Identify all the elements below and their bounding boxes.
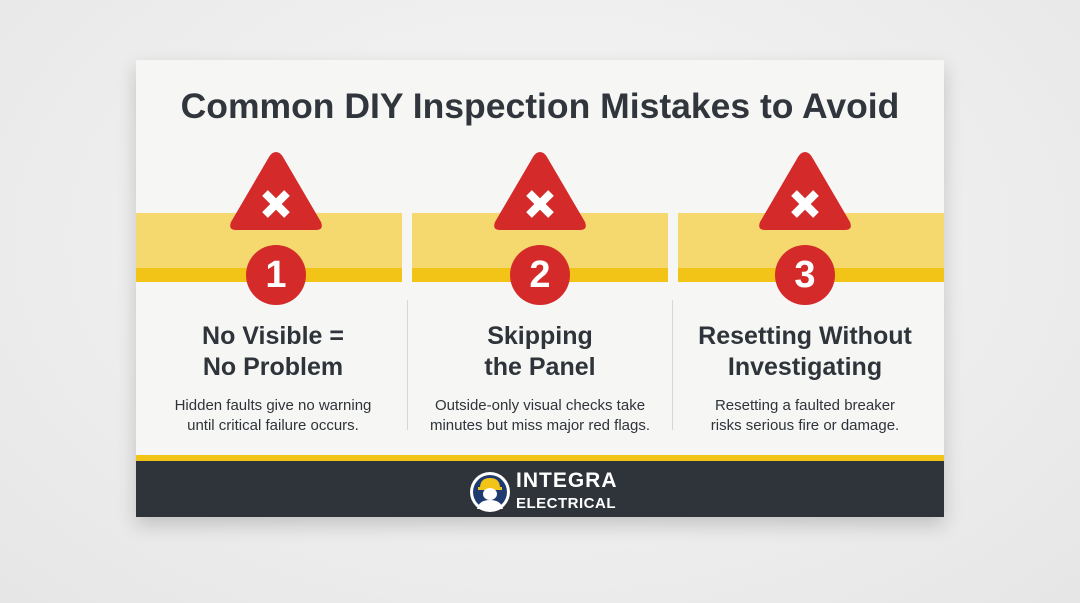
icon: warning triangle 1 xyxy=(230,152,322,230)
text 3: Resetting a faulted breaker xyxy=(715,397,895,414)
number 2: 2 xyxy=(529,254,551,296)
card xyxy=(136,60,944,517)
heading 2: the Panel xyxy=(484,353,596,381)
text 1 xyxy=(175,397,371,434)
text 3 xyxy=(711,397,899,434)
heading 1: No Visible = xyxy=(202,322,344,350)
heading 2: Skipping xyxy=(487,322,593,350)
brand text: ELECTRICAL xyxy=(516,495,616,512)
heading 3: Investigating xyxy=(728,353,882,381)
heading 1 xyxy=(202,322,344,381)
number 1 xyxy=(246,245,306,305)
text 2 xyxy=(430,397,650,434)
icon: warning triangle 2 xyxy=(494,152,586,230)
number 3: 3 xyxy=(794,254,816,296)
heading 1: No Problem xyxy=(203,353,343,381)
number 1: 1 xyxy=(265,254,287,296)
band 3 xyxy=(678,213,944,282)
text 2: minutes but miss major red flags. xyxy=(430,417,650,434)
number 2 xyxy=(510,245,570,305)
brand text xyxy=(516,469,618,512)
icon: worker xyxy=(470,472,510,512)
number 3 xyxy=(775,245,835,305)
heading 3: Resetting Without xyxy=(698,322,912,350)
text 1: until critical failure occurs. xyxy=(187,417,359,434)
icon: warning triangle 3 xyxy=(759,152,851,230)
text 1: Hidden faults give no warning xyxy=(175,397,371,414)
band 1 xyxy=(136,213,402,282)
heading 3 xyxy=(698,322,912,381)
brand text: INTEGRA xyxy=(516,469,618,492)
logo xyxy=(470,469,618,512)
band 2 xyxy=(412,213,668,282)
text 2: Outside-only visual checks take xyxy=(435,397,645,414)
text 3: risks serious fire or damage. xyxy=(711,417,899,434)
title: Common DIY Inspection Mistakes to Avoid xyxy=(181,86,899,126)
heading 2 xyxy=(484,322,596,381)
footer xyxy=(136,455,944,517)
